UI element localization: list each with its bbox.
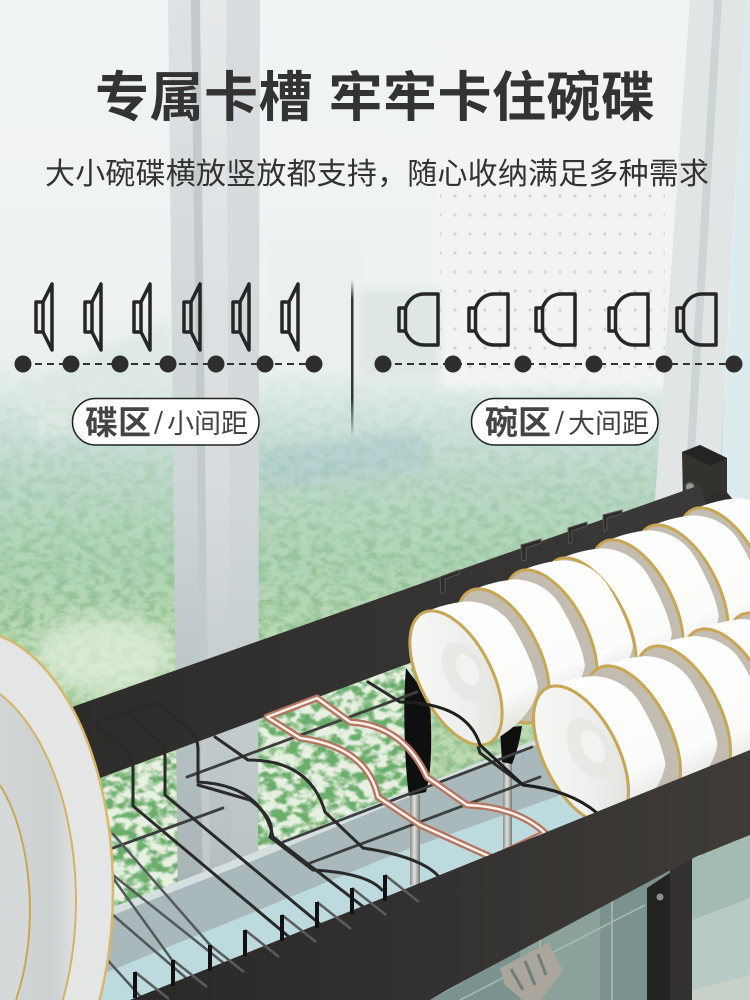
wire rack	[93, 682, 597, 996]
bowl zone spacing line	[374, 356, 742, 372]
grate wires	[103, 834, 245, 996]
hook and wave wires	[93, 682, 597, 957]
stacked plates	[0, 636, 113, 1000]
bowl zone icons	[399, 294, 716, 345]
rack leg	[647, 858, 692, 1000]
front rail	[130, 750, 750, 1000]
label: plate zone	[72, 398, 259, 445]
foliage texture	[0, 404, 748, 860]
right window frame	[655, 0, 750, 540]
back rail	[72, 485, 708, 778]
rail prongs	[97, 875, 419, 1000]
title: 专属卡槽 牢牢卡住碗碟	[95, 68, 655, 128]
front row of bowls	[532, 611, 750, 818]
cross wires	[113, 692, 540, 995]
distant buildings	[20, 40, 675, 440]
label: plate zone: 小间距	[167, 409, 248, 439]
under-rack wall and floor	[430, 835, 750, 1000]
lake and pale field	[35, 617, 175, 693]
label: bowl zone: 碗区	[485, 404, 551, 441]
back row of bowls	[408, 498, 750, 747]
wire passing in front of bowls	[400, 702, 597, 813]
highlighted copper slot	[267, 698, 545, 858]
label: bowl zone	[472, 398, 658, 445]
centre divider	[351, 280, 354, 438]
mist band	[260, 430, 430, 490]
subtitle: 大小碗碟横放竖放都支持，随心收纳满足多种需求	[45, 158, 709, 191]
knife set behind wires	[404, 668, 522, 885]
rail clips	[440, 510, 622, 594]
nearest back bowl	[408, 601, 538, 747]
window sill and counter	[100, 690, 660, 1000]
rack right corner bracket	[682, 445, 750, 535]
label: bowl zone: 大间距	[568, 409, 649, 439]
sharp foliage under rail	[100, 663, 417, 906]
fork	[500, 943, 563, 1000]
window background	[0, 194, 750, 906]
left window frame	[168, 0, 260, 905]
plate zone spacing line	[14, 356, 322, 372]
label: plate zone: 碟区	[85, 404, 151, 441]
plate zone icons	[36, 284, 298, 350]
nearest front bowl	[532, 676, 666, 818]
